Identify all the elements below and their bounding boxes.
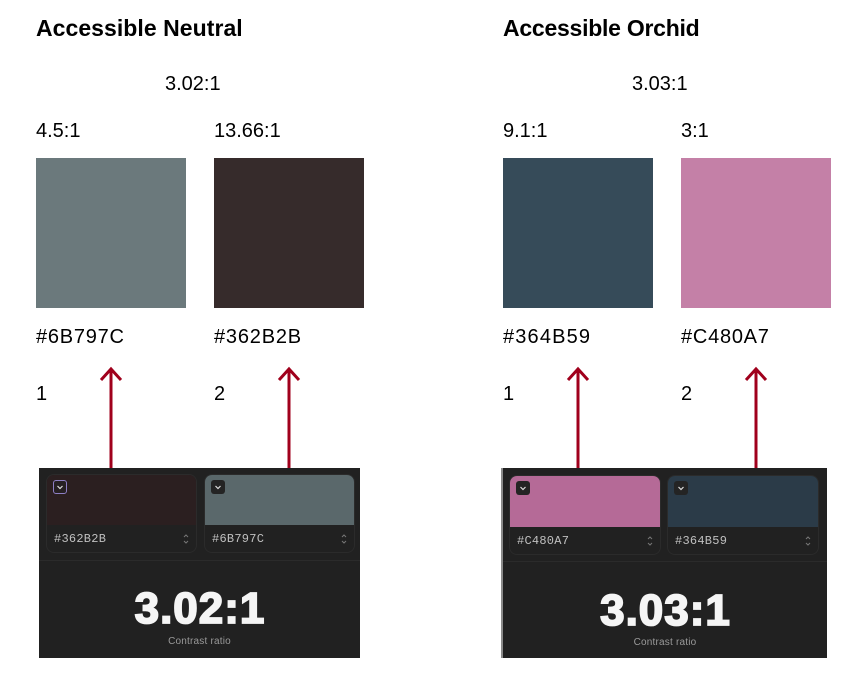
colour card: #362B2B: #362B2B bbox=[54, 532, 106, 546]
caption: Contrast ratio bbox=[634, 637, 696, 648]
heading: Accessible Orchid: Accessible Orchid bbox=[503, 15, 699, 41]
contrast ratio value: 3.03:1 bbox=[600, 586, 731, 635]
contrast ratio between swatches: 3.03:1 bbox=[632, 73, 688, 95]
caption: Contrast ratio bbox=[168, 636, 231, 647]
panel: Accessible Orchid bbox=[501, 15, 831, 658]
screenshot panel: neutral contrast checker bbox=[39, 468, 360, 658]
arrow: from pink card to swatch 1 bbox=[567, 366, 589, 468]
arrow: from navy card to swatch 2 bbox=[745, 366, 767, 468]
hex label: #6B797C: #6B797C bbox=[36, 326, 125, 348]
number 2: 2 bbox=[214, 383, 225, 405]
colour card: #C480A7 bbox=[509, 475, 661, 555]
number 1: 1 bbox=[503, 383, 514, 405]
swatch: #6B797C bbox=[36, 158, 186, 308]
panel: Accessible Neutral bbox=[36, 15, 364, 658]
arrow: from grey card to swatch 2 bbox=[278, 366, 300, 468]
swatch: #C480A7 bbox=[681, 158, 831, 308]
colour card: #C480A7: #C480A7 bbox=[517, 534, 569, 548]
ratio for swatch 2: 3:1 bbox=[681, 120, 709, 142]
swatch: #364B59 bbox=[503, 158, 653, 308]
heading: Accessible Neutral: Accessible Neutral bbox=[36, 15, 243, 41]
ratio for swatch 2: 13.66:1 bbox=[214, 120, 281, 142]
colour card: #6B797C: #6B797C bbox=[212, 532, 264, 546]
hex label: #C480A7: #C480A7 bbox=[681, 326, 770, 348]
contrast ratio between swatches: 3.02:1 bbox=[165, 73, 221, 95]
colour card: #6B797C bbox=[204, 474, 355, 553]
colour card: #364B59 bbox=[667, 475, 819, 555]
hex label: #362B2B: #362B2B bbox=[214, 326, 302, 348]
colour card: #362B2B bbox=[46, 474, 197, 553]
arrow: from dark card to swatch 1 bbox=[100, 366, 122, 468]
contrast ratio value: 3.02:1 bbox=[135, 584, 265, 633]
hex label: #364B59: #364B59 bbox=[503, 326, 591, 348]
number 1: 1 bbox=[36, 383, 47, 405]
ratio for swatch 1: 4.5:1 bbox=[36, 120, 80, 142]
number 2: 2 bbox=[681, 383, 692, 405]
colour card: #364B59: #364B59 bbox=[675, 534, 727, 548]
ratio for swatch 1: 9.1:1 bbox=[503, 120, 547, 142]
swatch: #362B2B bbox=[214, 158, 364, 308]
screenshot panel: orchid contrast checker bbox=[501, 468, 827, 658]
